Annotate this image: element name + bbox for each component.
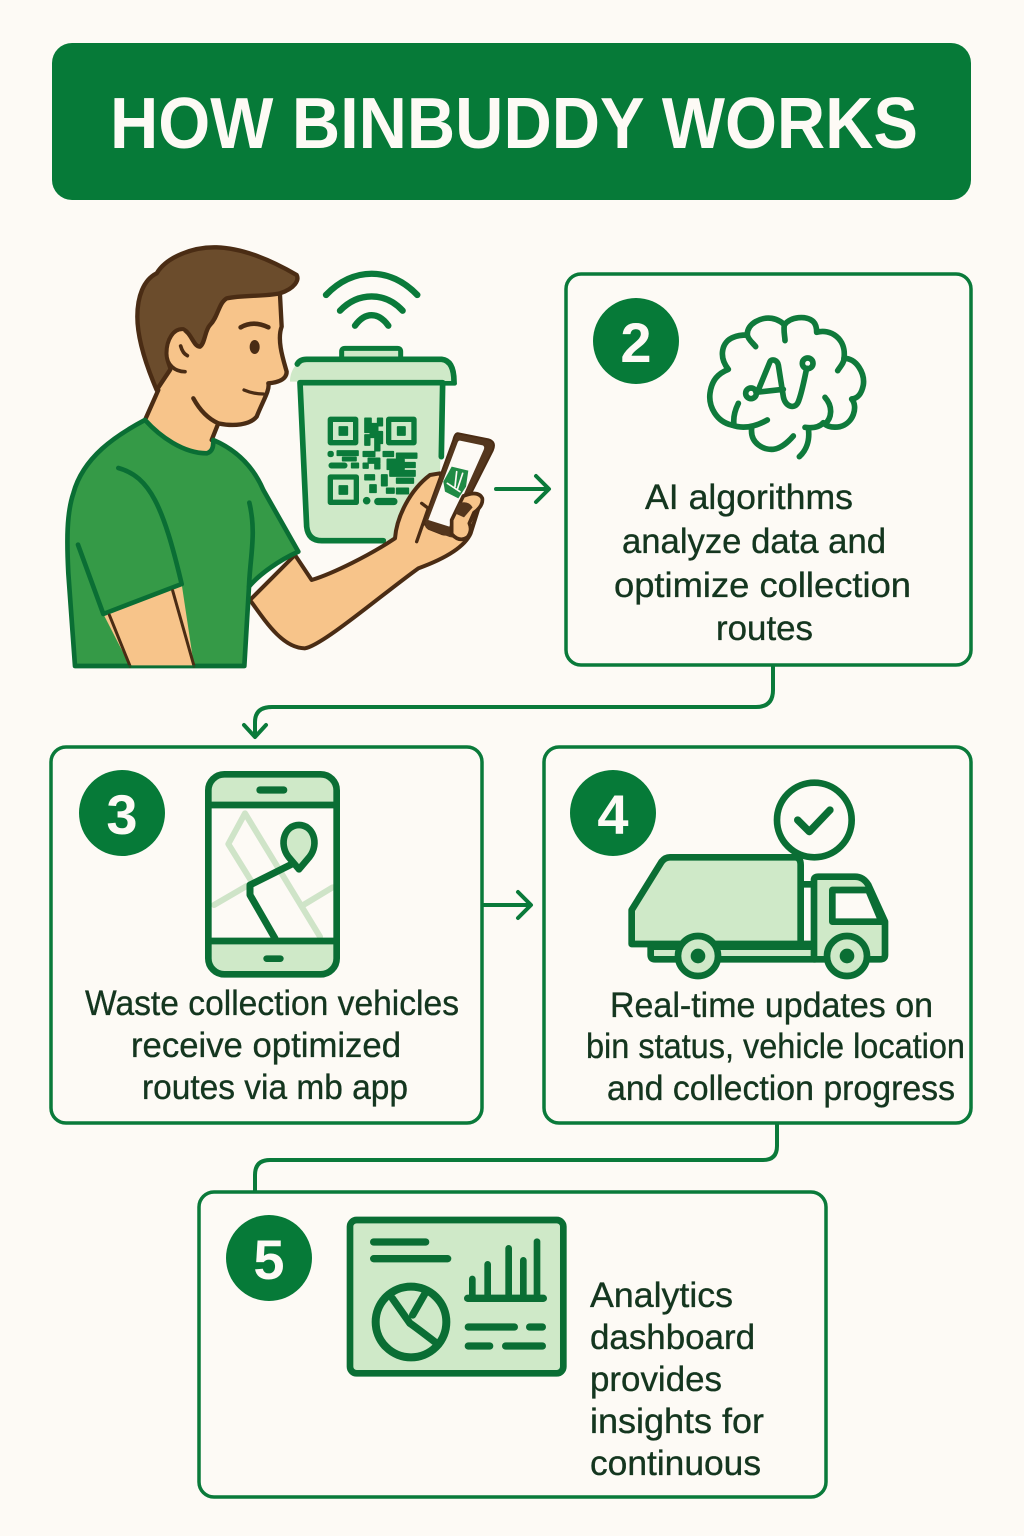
person: arm xyxy=(250,473,480,648)
icon: AI brain xyxy=(710,318,864,457)
number badge 2: 2 xyxy=(620,311,652,374)
number badge 2 xyxy=(593,298,679,384)
text: step 3 xyxy=(85,984,459,1107)
icon: smartphone in hand xyxy=(417,433,494,542)
icon: smart bin with QR code xyxy=(290,348,455,541)
person: hair xyxy=(137,247,297,390)
arrow: step 3 to step 4 xyxy=(484,892,531,918)
panel: step 3 xyxy=(51,747,482,1123)
arrow: step 2 to step 3 xyxy=(244,666,773,737)
step 1 illustration: person scanning smart bin xyxy=(67,247,494,666)
icon: wifi signal xyxy=(326,274,417,326)
text: step 3: receive optimized xyxy=(131,1026,401,1065)
icon: phone with map route xyxy=(208,774,337,974)
text: step 2 xyxy=(614,478,911,648)
text: step 4: bin status, vehicle location xyxy=(586,1027,965,1066)
text: step 3: Waste collection vehicles xyxy=(85,984,459,1023)
text: step 5: provides xyxy=(590,1360,722,1399)
title banner xyxy=(52,43,971,200)
text: step 5: insights for xyxy=(590,1402,764,1441)
icon: analytics dashboard xyxy=(350,1220,563,1373)
number badge 5: 5 xyxy=(253,1228,285,1291)
text: step 4: Real-time updates on xyxy=(610,986,933,1025)
panel: step 4 xyxy=(544,747,971,1123)
arrow: step 1 to step 2 xyxy=(496,476,549,502)
text: step 2: routes xyxy=(716,609,813,648)
panel: step 2 xyxy=(566,274,971,665)
person: ear and features xyxy=(167,329,187,372)
title banner: HOW BINBUDDY WORKS xyxy=(110,84,918,164)
text: step 3: routes via mb app xyxy=(142,1068,408,1107)
panel: step 5 xyxy=(199,1192,826,1497)
person: neck and face xyxy=(145,293,287,453)
icon: garbage truck with check mark xyxy=(632,783,885,976)
number badge 4 xyxy=(570,770,656,856)
number badge 4: 4 xyxy=(597,783,629,846)
arrow: step 4 to step 5 xyxy=(255,1124,777,1192)
text: step 5: dashboard xyxy=(590,1318,755,1357)
text: step 2: analyze data and xyxy=(622,522,886,561)
text: step 4 xyxy=(586,986,965,1108)
number badge 5 xyxy=(226,1215,312,1301)
QR code xyxy=(330,419,414,502)
text: step 5: Analytics xyxy=(590,1276,733,1315)
text: step 2: optimize collection xyxy=(614,566,911,605)
number badge 3 xyxy=(79,770,165,856)
number badge 3: 3 xyxy=(106,783,138,846)
text: step 5 xyxy=(590,1276,764,1483)
text: step 4: and collection progress xyxy=(607,1069,955,1108)
text: step 5: continuous xyxy=(590,1444,761,1483)
text: step 2: AI algorithms xyxy=(645,478,853,517)
person: green t-shirt xyxy=(67,420,298,666)
